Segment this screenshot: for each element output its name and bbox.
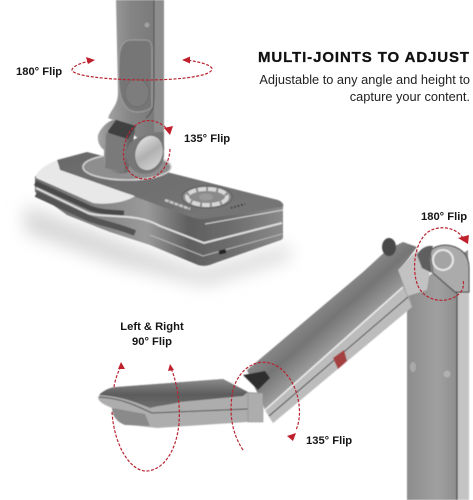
arm slot inner recess <box>125 79 149 107</box>
top hinge <box>382 238 469 296</box>
head underside <box>112 408 150 426</box>
camera head <box>98 379 263 428</box>
edge strip <box>457 262 469 500</box>
silver wedge <box>398 250 430 296</box>
red arrow: arm 135 flip <box>231 362 299 450</box>
logo <box>165 200 190 209</box>
label: 180 flip top: 180° Flip <box>16 66 62 78</box>
lower vertical arm <box>407 250 469 500</box>
head joint block <box>248 393 263 422</box>
rear bolt <box>382 238 396 256</box>
arm screw holes <box>144 22 150 28</box>
base lower body <box>35 176 283 266</box>
heading: MULTI-JOINTS TO ADJUST <box>258 49 470 66</box>
arm edge strip <box>154 0 164 132</box>
indicator dots <box>231 204 245 208</box>
arm slot <box>119 40 152 112</box>
keypad <box>182 186 232 208</box>
base seam bands <box>35 183 124 213</box>
hinge knob <box>433 250 453 270</box>
head seam <box>99 397 263 413</box>
description: Adjustable to any angle and height to <box>259 72 470 87</box>
base white bevel <box>36 160 135 204</box>
label: 135 flip arm: 135° Flip <box>306 435 352 447</box>
base lower highlight <box>150 234 282 256</box>
base top edge highlight <box>205 210 283 224</box>
red arrow: top 180 flip <box>72 60 212 80</box>
base shadow <box>25 205 290 285</box>
red arrow: head rotation <box>112 362 179 471</box>
document camera upper arm <box>108 0 164 150</box>
pivot dark block <box>108 120 136 139</box>
arm screws <box>410 362 416 372</box>
hinge plate <box>430 245 469 292</box>
pivot joint <box>98 120 168 174</box>
usb port <box>219 249 226 255</box>
hinge collar <box>417 246 433 273</box>
red marker <box>333 350 347 369</box>
label: left and right 90 flip: Left & Right <box>120 321 184 333</box>
arrowheads: top 180 flip <box>86 56 190 64</box>
base unit <box>35 152 283 266</box>
angled arm <box>243 242 417 423</box>
pivot collar <box>126 136 164 174</box>
base top face <box>57 152 283 219</box>
silver knob <box>130 132 168 174</box>
label: left and right 90 flip: 90° Flip <box>132 336 172 348</box>
turntable disc <box>83 154 171 180</box>
label: 135 flip base: 135° Flip <box>184 133 230 145</box>
side face <box>265 287 412 423</box>
head top face <box>99 379 248 408</box>
label: 180 flip hinge: 180° Flip <box>421 211 467 223</box>
hinge slot <box>243 371 270 390</box>
description: capture your content. <box>350 89 470 104</box>
red arrow: hinge 180 flip <box>415 228 469 300</box>
red arrow: base 135 flip <box>123 121 173 179</box>
